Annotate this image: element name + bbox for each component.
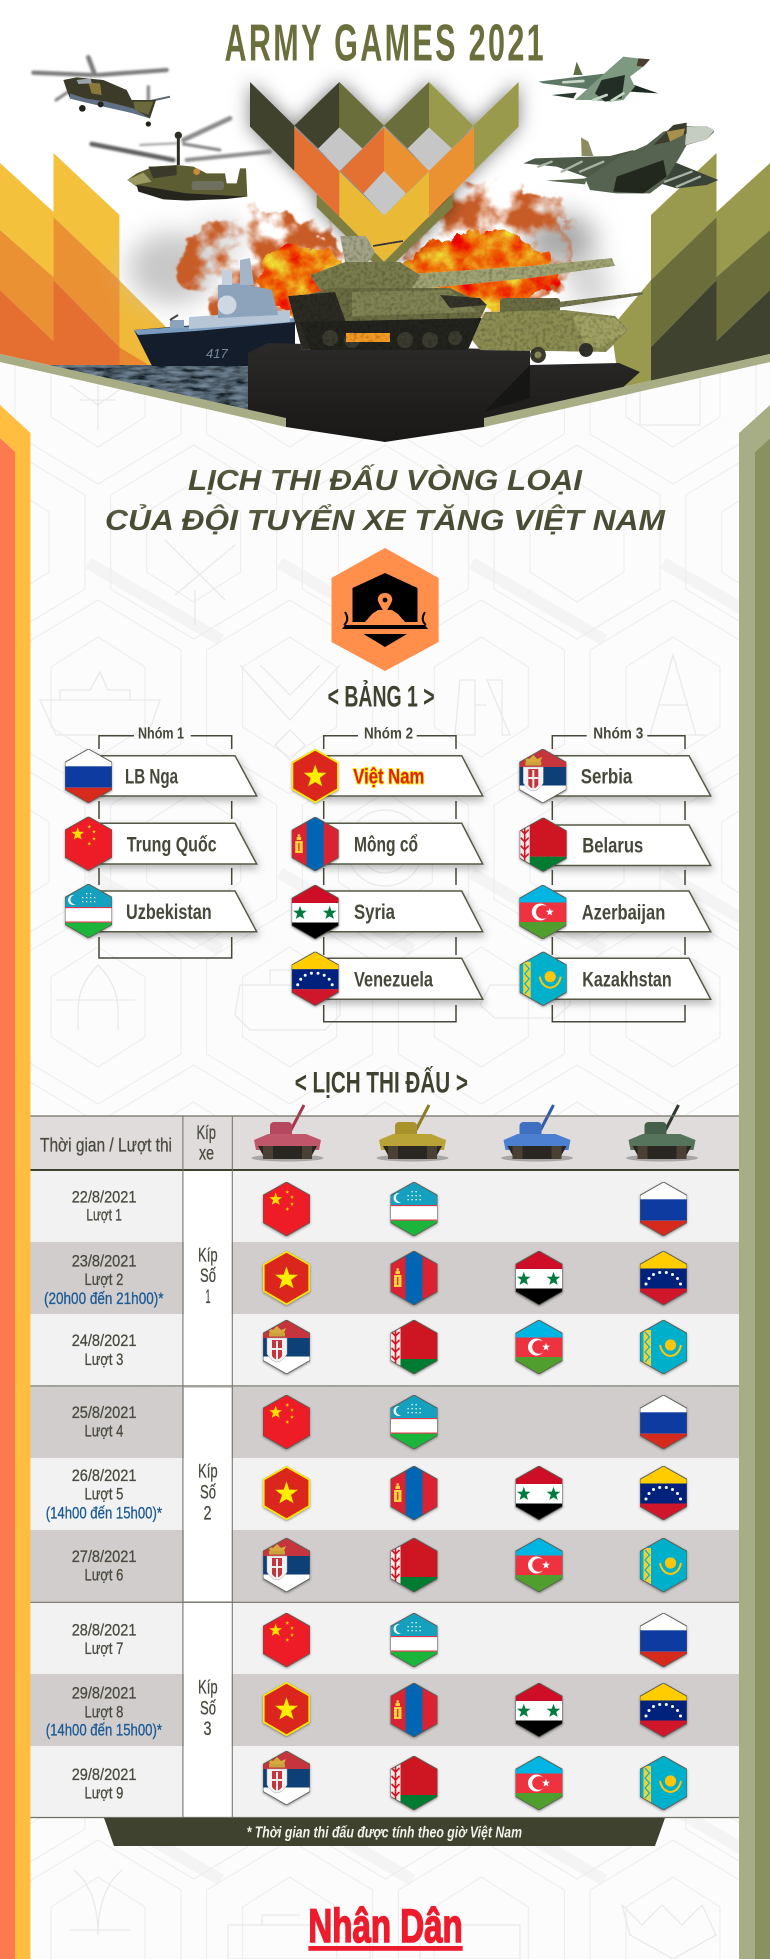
background military icons <box>40 350 716 1959</box>
round 7: 28/8/2021 <box>72 1621 136 1640</box>
team: Uzbekistan <box>65 884 257 939</box>
flags round 6 <box>263 1538 687 1593</box>
title: ARMY GAMES 2021 <box>224 14 546 72</box>
Army Games chevron logo <box>250 82 519 273</box>
icon: blue tank <box>501 1105 573 1162</box>
smoke clouds <box>128 214 610 307</box>
Nhan Dan logo: Nhân Dân <box>308 1899 463 1952</box>
team: Venezuela: Venezuela <box>354 969 433 992</box>
team: Azerbaijan <box>519 885 711 940</box>
round 2: 23/8/2021 <box>72 1252 136 1271</box>
heading line 1: LỊCH THI ĐẤU VÒNG LOẠI <box>188 463 583 497</box>
round 7 <box>72 1621 136 1658</box>
hero main battle tank <box>288 236 615 350</box>
group 1 label: Nhóm 1 <box>138 726 184 742</box>
group 1 bracket <box>99 726 232 958</box>
round 9: Lượt 9 <box>84 1783 123 1802</box>
group 3 bracket <box>552 726 685 1022</box>
round 9: 29/8/2021 <box>72 1765 136 1784</box>
helicopter 2 <box>92 118 270 201</box>
round 4 <box>72 1403 136 1441</box>
crew 1 label: 1 <box>206 1287 210 1308</box>
crew 3 label: 3 <box>204 1719 212 1740</box>
team: Kazakhstan <box>520 952 711 1006</box>
icon: green tank <box>626 1105 698 1162</box>
round 6: Lượt 6 <box>84 1566 123 1585</box>
flags round 8 <box>263 1682 687 1738</box>
team: Viet Nam highlighted <box>292 749 483 803</box>
icon: red tank <box>252 1105 324 1162</box>
olive header band <box>0 354 770 427</box>
schedule table <box>30 1105 739 1818</box>
team: Trung Quoc <box>65 817 257 871</box>
explosion smoke wisps <box>183 180 575 320</box>
flags round 1 <box>263 1182 687 1237</box>
round 6 <box>72 1547 136 1585</box>
round 3 <box>72 1331 136 1369</box>
team: Kazakhstan: Kazakhstan <box>582 969 672 992</box>
left side stripes <box>0 405 30 1959</box>
flags round 2 <box>263 1251 687 1306</box>
table rules <box>30 1116 739 1818</box>
round 4: Lượt 4 <box>84 1422 123 1441</box>
crew 3 label: Kíp <box>198 1677 218 1698</box>
footnote banner: * Thời gian thi đấu được tính theo giờ Việt Nam <box>247 1824 522 1841</box>
team: LB Nga: LB Nga <box>125 765 178 788</box>
right chevrons <box>611 153 770 390</box>
flags round 3 <box>263 1320 687 1375</box>
table header row: xe <box>199 1143 214 1164</box>
heading line 2: CỦA ĐỘI TUYỂN XE TĂNG VIỆT NAM <box>105 502 666 537</box>
round 5: (14h00 đến 15h00)* <box>46 1503 162 1522</box>
round 8: 29/8/2021 <box>72 1683 136 1702</box>
round dates <box>44 1187 164 1802</box>
team: LB Nga <box>65 749 257 804</box>
round 3: 24/8/2021 <box>72 1331 136 1350</box>
round 8: Lượt 8 <box>84 1702 123 1721</box>
round 8 <box>46 1683 162 1740</box>
team: Serbia: Serbia <box>581 765 633 788</box>
crew 2 label: 2 <box>204 1503 212 1524</box>
team: Venezuela <box>292 952 483 1006</box>
round 1: Lượt 1 <box>86 1206 122 1225</box>
round 5 <box>46 1466 162 1522</box>
footnote banner <box>104 1818 665 1846</box>
dark pedestal <box>248 343 640 442</box>
section heading: Lich thi dau: < LỊCH THI ĐẤU > <box>295 1065 468 1099</box>
team: Trung Quoc: Trung Quốc <box>127 834 217 857</box>
crew 1 label <box>198 1246 218 1308</box>
flags round 9 <box>263 1751 687 1811</box>
round 8: (14h00 đến 15h00)* <box>46 1721 162 1740</box>
round 1: 22/8/2021 <box>72 1187 136 1206</box>
round 5: Lượt 5 <box>84 1484 123 1503</box>
round 2 <box>44 1252 164 1308</box>
team: Viet Nam highlighted: Việt Nam <box>353 765 424 788</box>
group 2 label: Nhóm 2 <box>364 726 413 742</box>
crew 2 label: Số <box>200 1482 216 1503</box>
flags round 7 <box>263 1613 687 1668</box>
team: Mong co: Mông cổ <box>354 834 418 857</box>
table header row <box>30 1116 739 1169</box>
main heading <box>105 463 666 537</box>
round 5: 26/8/2021 <box>72 1466 136 1485</box>
crew 1 label: Kíp <box>198 1246 218 1267</box>
round 3: Lượt 3 <box>84 1350 123 1369</box>
right side stripes <box>739 405 770 1959</box>
hero armoured vehicle <box>472 292 643 363</box>
team: Belarus <box>520 818 711 873</box>
team: Uzbekistan: Uzbekistan <box>126 901 212 924</box>
explosion fire <box>255 232 555 314</box>
team: Serbia <box>519 749 711 804</box>
icon: gold tank <box>376 1105 448 1162</box>
crew 2 label: Kíp <box>198 1462 218 1483</box>
round 2: Lượt 2 <box>84 1270 123 1289</box>
fighter jet 1 <box>538 57 658 102</box>
section heading: Bang 1: < BẢNG 1 > <box>328 680 435 714</box>
round 6: 27/8/2021 <box>72 1547 136 1566</box>
crew 2 label <box>198 1462 218 1524</box>
crew 3 label <box>198 1677 218 1740</box>
round 9 <box>72 1765 136 1802</box>
team: Mong co <box>292 817 483 871</box>
group 2 bracket <box>324 726 456 1022</box>
table header row: Kíp <box>196 1123 216 1144</box>
sea <box>49 365 250 410</box>
team: Belarus: Belarus <box>582 834 643 857</box>
header white area <box>0 0 770 442</box>
fighter jet 2 <box>523 123 718 193</box>
round 2: (20h00 đến 21h00)* <box>44 1289 164 1308</box>
team: Azerbaijan: Azerbaijan <box>582 901 665 924</box>
table header row: Thời gian / Lượt thi <box>40 1136 172 1157</box>
header corner chevrons <box>0 153 770 390</box>
warship <box>134 258 295 366</box>
left chevrons <box>0 153 167 376</box>
crew 1 label: Số <box>200 1266 216 1287</box>
crew 3 label: Số <box>200 1698 216 1719</box>
team: Syria <box>292 885 483 940</box>
helicopter 1 <box>33 57 170 127</box>
round 4: 25/8/2021 <box>72 1403 136 1422</box>
team: Syria: Syria <box>354 901 395 924</box>
round 7: Lượt 7 <box>84 1639 123 1658</box>
flags round 4 <box>263 1395 687 1450</box>
table row backgrounds <box>30 1171 739 1817</box>
group 3 label: Nhóm 3 <box>593 726 643 742</box>
round 1 <box>72 1187 136 1225</box>
icon: location hexagon badge <box>332 548 439 671</box>
hull number: 417 <box>206 346 228 361</box>
flags round 5 <box>263 1466 687 1520</box>
